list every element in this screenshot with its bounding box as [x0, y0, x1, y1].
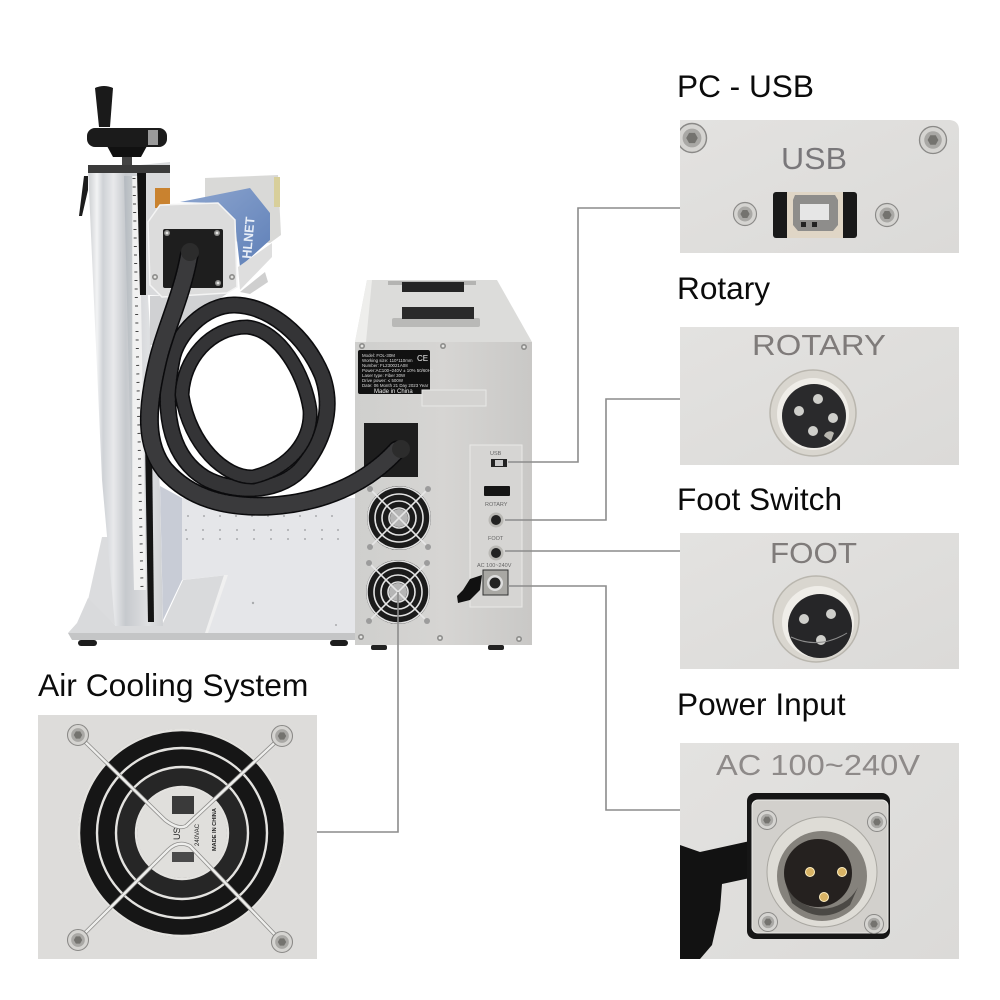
- specification label: Power:AC100~240V ± 10% 50/60Hz: [362, 368, 433, 373]
- specification label: Number: FL230021A08: [362, 363, 408, 368]
- photo panel: USB: [678, 120, 959, 253]
- panel corner screws: [358, 343, 527, 642]
- box rear panel: [355, 342, 532, 645]
- photo panel: USB: USB: [781, 141, 847, 176]
- photo panel: Power Input: [680, 743, 959, 959]
- photo panel: Rotary: [680, 327, 959, 465]
- specification label: Model: FOL-30M: [362, 353, 395, 358]
- photo panel: Foot: [680, 533, 959, 669]
- box feet: [371, 645, 504, 650]
- specification label: CE: [417, 354, 428, 363]
- specification label: Working size: 110*110mm: [362, 358, 413, 363]
- foot port: FOOT: [488, 536, 504, 542]
- control box (rear view): [355, 280, 532, 650]
- specification label: Laser type: Fiber 30W: [362, 373, 406, 378]
- fan 1: [367, 486, 431, 550]
- ac port cap: [457, 575, 482, 603]
- fan body: [78, 729, 286, 937]
- heading: Air Cooling System: Air Cooling System: [38, 667, 308, 703]
- specification label: [358, 350, 433, 395]
- fiber cable, corrugated hose: [149, 243, 410, 506]
- fan 2: [366, 560, 430, 624]
- fan hub label: US: [172, 827, 182, 840]
- laser head: HLNET: [239, 216, 258, 259]
- fan hub label: [137, 788, 227, 878]
- heading: Power Input: Power Input: [677, 686, 846, 722]
- blank plate: [422, 390, 486, 406]
- ac input port: AC 100~240V: [477, 563, 512, 569]
- heading: Foot Switch: Foot Switch: [677, 481, 842, 517]
- power connector: [767, 817, 877, 927]
- specification label: Drive power: ≤ 500W: [362, 378, 404, 383]
- laser machine: column, head and base: [68, 86, 356, 646]
- laser head: [148, 175, 281, 297]
- photo panel: Air Cooling System: [38, 715, 317, 959]
- leader line: USB: [508, 208, 680, 462]
- box top and handles: [355, 280, 532, 342]
- usb b socket: [773, 192, 857, 238]
- fan guard rings: [79, 730, 285, 936]
- rear side plate: [160, 486, 182, 620]
- guard screws: [68, 724, 292, 952]
- specification label: Made in China: [374, 389, 413, 395]
- vertical column with ruler: [79, 162, 170, 626]
- db connector: [484, 486, 510, 496]
- leader line: Foot: [505, 550, 680, 552]
- ac input port: [477, 563, 512, 595]
- foot connector: [773, 576, 859, 662]
- base plate and table: [68, 498, 356, 646]
- leader line: Power: [508, 586, 680, 810]
- usb port: USB: [490, 451, 502, 457]
- fiber port plate: [364, 423, 418, 477]
- handwheel: [87, 86, 167, 165]
- photo panel: Power Input: AC 100~240V: [716, 750, 921, 782]
- rotary port: ROTARY: [485, 502, 508, 508]
- photo panel: Foot: FOOT: [770, 538, 857, 570]
- head bracket: [150, 293, 228, 345]
- heading: PC - USB: PC - USB: [677, 68, 814, 104]
- power flange: [747, 793, 890, 939]
- fan hub label: 240VAC: [195, 823, 201, 846]
- rotary port: [485, 502, 508, 528]
- foot port: [488, 536, 504, 560]
- power cap and strap: [680, 841, 750, 959]
- usb port: [490, 451, 507, 467]
- port panel: [457, 445, 522, 607]
- leader line: Rotary: [505, 399, 680, 520]
- photo panel: Rotary: ROTARY: [752, 330, 886, 362]
- heading: Rotary: Rotary: [677, 270, 770, 306]
- specification label: Date: 06 Month 21 Day 2023 Year: [362, 383, 429, 388]
- rotary connector: [770, 370, 856, 456]
- fan guard wires: [78, 735, 282, 942]
- fan hub label: MADE IN CHINA: [212, 808, 218, 851]
- leader line: Air cooling: [317, 592, 398, 832]
